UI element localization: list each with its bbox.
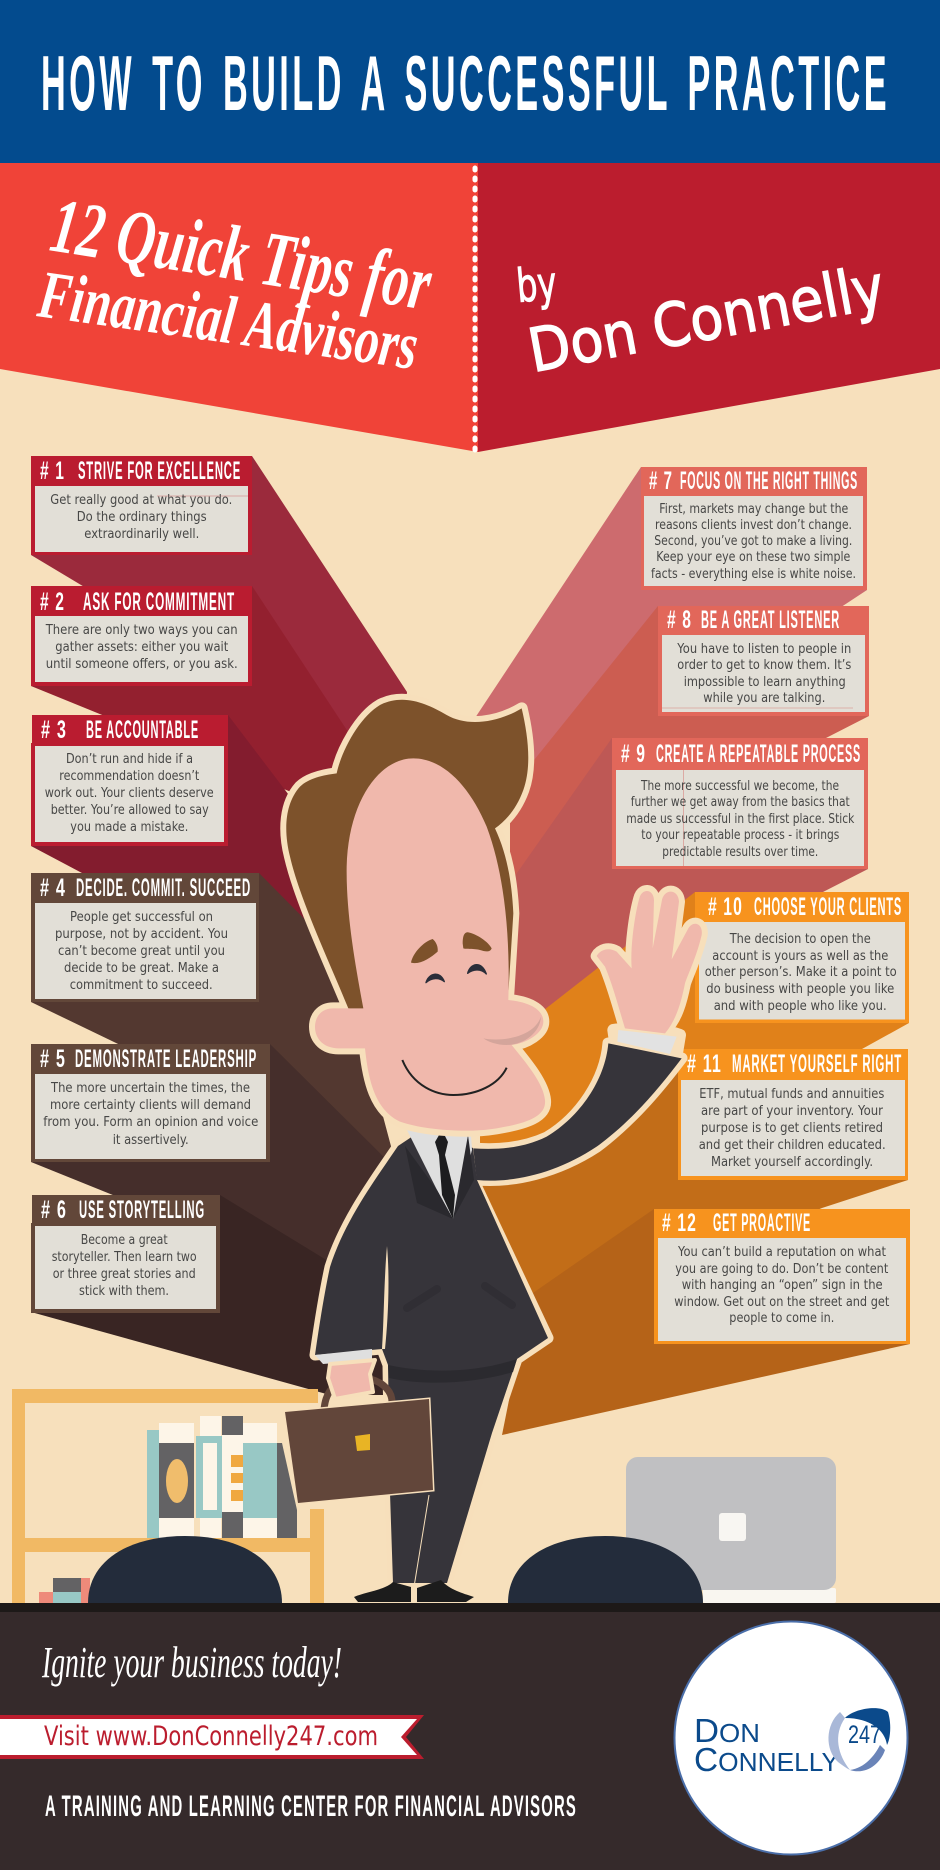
logo wordmark xyxy=(694,1712,839,1778)
tip 2: until someone offers, or you ask. xyxy=(46,657,238,672)
subtitle script line 1: 12 Quick Tips for xyxy=(45,181,438,327)
tip 5 xyxy=(31,1044,270,1162)
tip 7: Second, you’ve got to make a living. xyxy=(654,534,852,549)
tip 10: do business with people you like xyxy=(706,982,894,997)
tip 5: The more uncertain the times, the xyxy=(50,1081,250,1096)
logo swoosh 247 xyxy=(828,1708,890,1771)
tip 7: First, markets may change but the xyxy=(659,502,848,517)
bookshelf with books xyxy=(12,1389,324,1603)
subtitle script line 2: Financial Advisors xyxy=(33,255,423,384)
tip 4: commitment to succeed. xyxy=(70,978,213,993)
visit ribbon: Visit www.DonConnelly247.com xyxy=(44,1721,378,1752)
tip 4: purpose, not by accident. You xyxy=(55,927,228,942)
tip 3: # 3 xyxy=(41,716,67,744)
character: businessman xyxy=(285,700,702,1602)
laptop xyxy=(626,1457,836,1603)
eyebrows xyxy=(411,932,492,963)
smile xyxy=(402,1060,507,1095)
tip 9: to your repeatable process - it brings xyxy=(641,828,839,843)
tip 2 xyxy=(31,586,252,686)
tip 1: Do the ordinary things xyxy=(77,510,207,525)
tip 3: recommendation doesn’t xyxy=(59,769,199,784)
tip 6: # 6 xyxy=(41,1196,67,1224)
tip 9: made us successful in the first place. Stick xyxy=(626,812,855,827)
left hand xyxy=(328,1360,375,1399)
tip 12: You can’t build a reputation on what xyxy=(677,1245,886,1260)
tip 8: order to get to know them. It’s xyxy=(677,658,851,673)
tip 12 xyxy=(654,1209,910,1344)
tip 11: are part of your inventory. Your xyxy=(701,1104,884,1119)
pockets xyxy=(407,1286,512,1308)
floor band xyxy=(0,1603,940,1612)
jacket xyxy=(315,1128,548,1371)
infographic canvas: STRIVE FOR EXCELLENCE xyxy=(78,457,241,485)
tip 3: better. You’re allowed to say xyxy=(51,803,209,818)
tip 11: Market yourself accordingly. xyxy=(711,1155,873,1170)
title banner xyxy=(0,0,940,163)
tip 1: Get really good at what you do. xyxy=(50,493,232,508)
footer tagline: Ignite your business today! xyxy=(41,1638,342,1687)
dark shape right xyxy=(508,1536,703,1603)
tip 10: account is yours as well as the xyxy=(712,949,888,964)
head outline xyxy=(286,700,545,1131)
tip 11: and get their children educated. xyxy=(699,1138,886,1153)
tip 10: The decision to open the xyxy=(729,932,871,947)
tip 8: # 8 xyxy=(667,606,692,634)
tip 11 xyxy=(678,1049,908,1180)
tip 6: or three great stories and xyxy=(53,1267,196,1282)
logo badge xyxy=(674,1622,908,1854)
tip 12: window. Get out on the street and get xyxy=(674,1295,889,1310)
laptop logo xyxy=(719,1513,746,1541)
tip 10: other person’s. Make it a point to xyxy=(705,965,897,980)
tip 7: reasons clients invest don’t change. xyxy=(655,518,852,533)
tip 7: # 7 xyxy=(649,467,673,495)
tip 6: storyteller. Then learn two xyxy=(52,1250,197,1265)
tip 6: Become a great xyxy=(81,1233,168,1248)
tip 6: stick with them. xyxy=(79,1284,169,1299)
tip 12: with hanging an “open” sign in the xyxy=(682,1278,883,1293)
tip 4 xyxy=(31,873,259,1002)
shoes xyxy=(354,1580,474,1602)
logo wordmark: DON xyxy=(694,1712,760,1749)
long shadows left xyxy=(31,456,410,1395)
sleeve slit xyxy=(382,1246,388,1349)
tip 8: while you are talking. xyxy=(703,691,825,706)
raised hand xyxy=(473,891,702,1181)
footer panel xyxy=(0,1612,940,1870)
tip 1: extraordinarily well. xyxy=(84,527,199,542)
tip 7: facts - everything else is white noise. xyxy=(651,567,856,582)
tip 4: decide to be great. Make a xyxy=(64,961,219,976)
subtitle ribbon xyxy=(0,163,940,452)
tip 3: Don’t run and hide if a xyxy=(66,752,193,767)
tip 12: people to come in. xyxy=(729,1311,834,1326)
pants xyxy=(388,1359,517,1583)
tip 11: purpose is to get clients retired xyxy=(701,1121,883,1136)
tip 10: # 10 xyxy=(708,893,743,921)
tip 2: gather assets: either you wait xyxy=(55,640,228,655)
tip 5: # 5 xyxy=(40,1045,66,1073)
tip 3: work out. Your clients deserve xyxy=(45,786,214,801)
tip 9: The more successful we become, the xyxy=(640,779,839,794)
raised hand and head xyxy=(286,700,702,1181)
tip 1: # 1 xyxy=(40,457,65,485)
tip 4: People get successful on xyxy=(70,910,213,925)
tip 9 xyxy=(612,738,868,869)
tip 8: You have to listen to people in xyxy=(676,642,851,657)
tip 5: it assertively. xyxy=(113,1133,189,1148)
tip 9: further we get away from the basics that xyxy=(631,795,850,810)
tip 9: # 9 xyxy=(621,740,646,768)
visit ribbon xyxy=(0,1715,424,1759)
tip 2: There are only two ways you can xyxy=(45,623,238,638)
tip 12: # 12 xyxy=(662,1209,697,1237)
tip 1 xyxy=(31,456,252,555)
logo wordmark: CONNELLY xyxy=(694,1741,839,1778)
body outline xyxy=(315,1043,682,1583)
eyes xyxy=(426,965,486,983)
tip 12: you are going to do. Don’t be content xyxy=(675,1262,888,1277)
tip 7: Keep your eye on these two simple xyxy=(656,550,850,565)
nose shadow xyxy=(483,1017,541,1045)
tip 4: # 4 xyxy=(40,874,66,902)
cuff left xyxy=(315,1349,372,1364)
briefcase xyxy=(285,1399,433,1503)
hair xyxy=(286,700,528,1013)
tip 6: USE STORYTELLING xyxy=(79,1196,205,1224)
tip 8: impossible to learn anything xyxy=(684,675,846,690)
tip 2: ASK FOR COMMITMENT xyxy=(83,588,235,616)
belt shadow xyxy=(388,1359,517,1383)
tip 9: predictable results over time. xyxy=(662,845,818,860)
tip 5: from you. Form an opinion and voice xyxy=(43,1115,258,1130)
tip 8 xyxy=(658,606,869,716)
tip 2: # 2 xyxy=(40,588,65,616)
tie xyxy=(435,1130,455,1219)
face xyxy=(315,758,545,1131)
tip 7 xyxy=(641,467,867,590)
tip 11: ETF, mutual funds and annuities xyxy=(699,1087,884,1102)
collar xyxy=(402,1120,472,1219)
infographic canvas: DECIDE. COMMIT. SUCCEED xyxy=(76,874,251,902)
tip 3: BE ACCOUNTABLE xyxy=(86,716,199,744)
tip 6 xyxy=(31,1195,220,1313)
by: by xyxy=(514,256,559,313)
author name: Don Connelly xyxy=(523,252,890,387)
tip 12: GET PROACTIVE xyxy=(713,1209,811,1237)
tip 10 xyxy=(695,892,909,1023)
tip 10: and with people who like you. xyxy=(714,999,887,1014)
long shadows right xyxy=(475,467,910,1435)
logo swoosh 247: 247 xyxy=(848,1721,881,1749)
tip 4: can’t become great until you xyxy=(58,944,225,959)
briefcase handle xyxy=(324,1378,392,1410)
tip 3 xyxy=(31,715,228,846)
tip 3: you made a mistake. xyxy=(70,820,188,835)
lapels xyxy=(405,1135,474,1219)
infographic canvas: DEMONSTRATE LEADERSHIP xyxy=(75,1045,257,1073)
tip 11: # 11 xyxy=(687,1050,722,1078)
dark shape left xyxy=(88,1536,282,1603)
tip 5: more certainty clients will demand xyxy=(50,1098,251,1113)
